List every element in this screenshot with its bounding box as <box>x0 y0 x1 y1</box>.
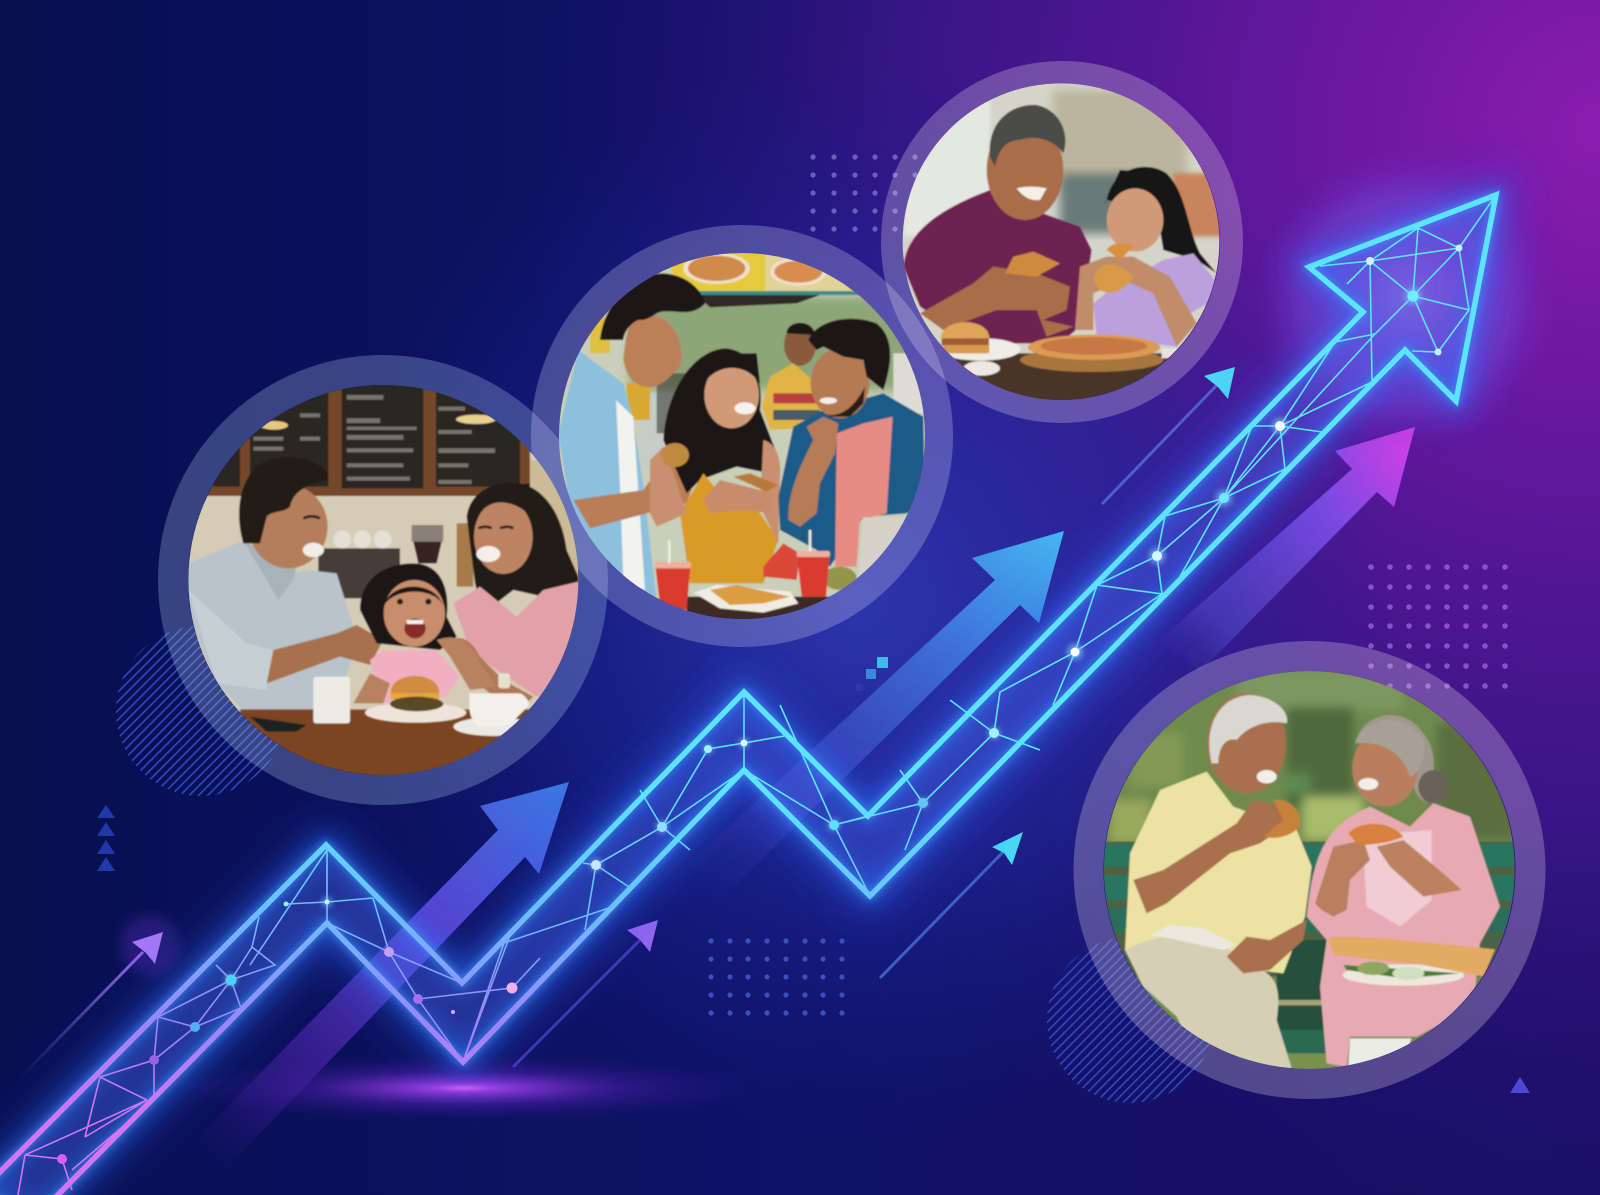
blurred foliage <box>1110 670 1513 843</box>
chair <box>763 543 800 580</box>
icon: stacked triangles <box>97 805 115 871</box>
centre woman <box>650 348 780 583</box>
icon: pixel squares <box>856 657 888 691</box>
arrow: large magenta right <box>1160 427 1415 672</box>
mugs <box>313 677 533 736</box>
red cups <box>655 530 830 610</box>
hatched disc: left <box>116 626 286 796</box>
girl <box>353 563 497 703</box>
blurred background <box>903 90 1223 237</box>
photo: three friends at a street food stall <box>559 253 925 619</box>
photo: senior couple on a park bench <box>1100 663 1520 1080</box>
coffee counter <box>318 523 473 598</box>
man <box>903 105 1092 343</box>
photo: family of three at a cafe <box>183 383 597 783</box>
icon: small triangle bottom right <box>1510 1077 1530 1093</box>
arrow: large blue centre <box>680 531 1064 905</box>
woman <box>1307 715 1500 1067</box>
dot grid: top centre <box>810 154 918 232</box>
hatched disc: right <box>1047 937 1213 1103</box>
ring: seniors circle <box>1088 656 1530 1084</box>
man <box>188 457 383 713</box>
girl <box>1075 167 1217 347</box>
menu boards <box>207 383 530 496</box>
table and food <box>687 567 857 627</box>
arrow: thin cyan lower right <box>880 832 1023 978</box>
burger plate <box>365 676 466 723</box>
table <box>937 353 1197 407</box>
right man <box>778 319 925 567</box>
glowing nodes <box>57 244 1462 1164</box>
dot grid: right <box>1368 564 1508 689</box>
ring: friends circle <box>545 239 939 633</box>
man <box>1125 693 1312 1068</box>
arrow: thin cyan upper right <box>1102 367 1235 504</box>
left man <box>558 273 705 600</box>
main zigzag growth arrow <box>0 195 1496 1195</box>
arrow: thin purple far left <box>18 915 180 1080</box>
dot grid: bottom centre <box>708 938 845 1016</box>
bench <box>1103 842 1517 1073</box>
floor glow <box>164 1054 764 1122</box>
woman <box>443 483 580 703</box>
ring: family circle <box>173 370 593 790</box>
icon: arrowhead glow <box>1255 150 1555 450</box>
arrow: large blue-purple lower <box>190 782 569 1175</box>
background person <box>762 323 823 430</box>
ring: father daughter circle <box>892 72 1232 412</box>
burger plate <box>939 322 1021 376</box>
laptop <box>858 517 907 577</box>
mesh lines inside arrow <box>18 195 1496 1195</box>
pizza board <box>1020 335 1178 372</box>
background stall <box>590 250 930 470</box>
table <box>240 709 530 777</box>
photo: father and daughter eating pizza and burgers <box>897 80 1230 413</box>
arrow: thin purple lower middle <box>513 920 658 1067</box>
dosa plate <box>1328 937 1495 986</box>
